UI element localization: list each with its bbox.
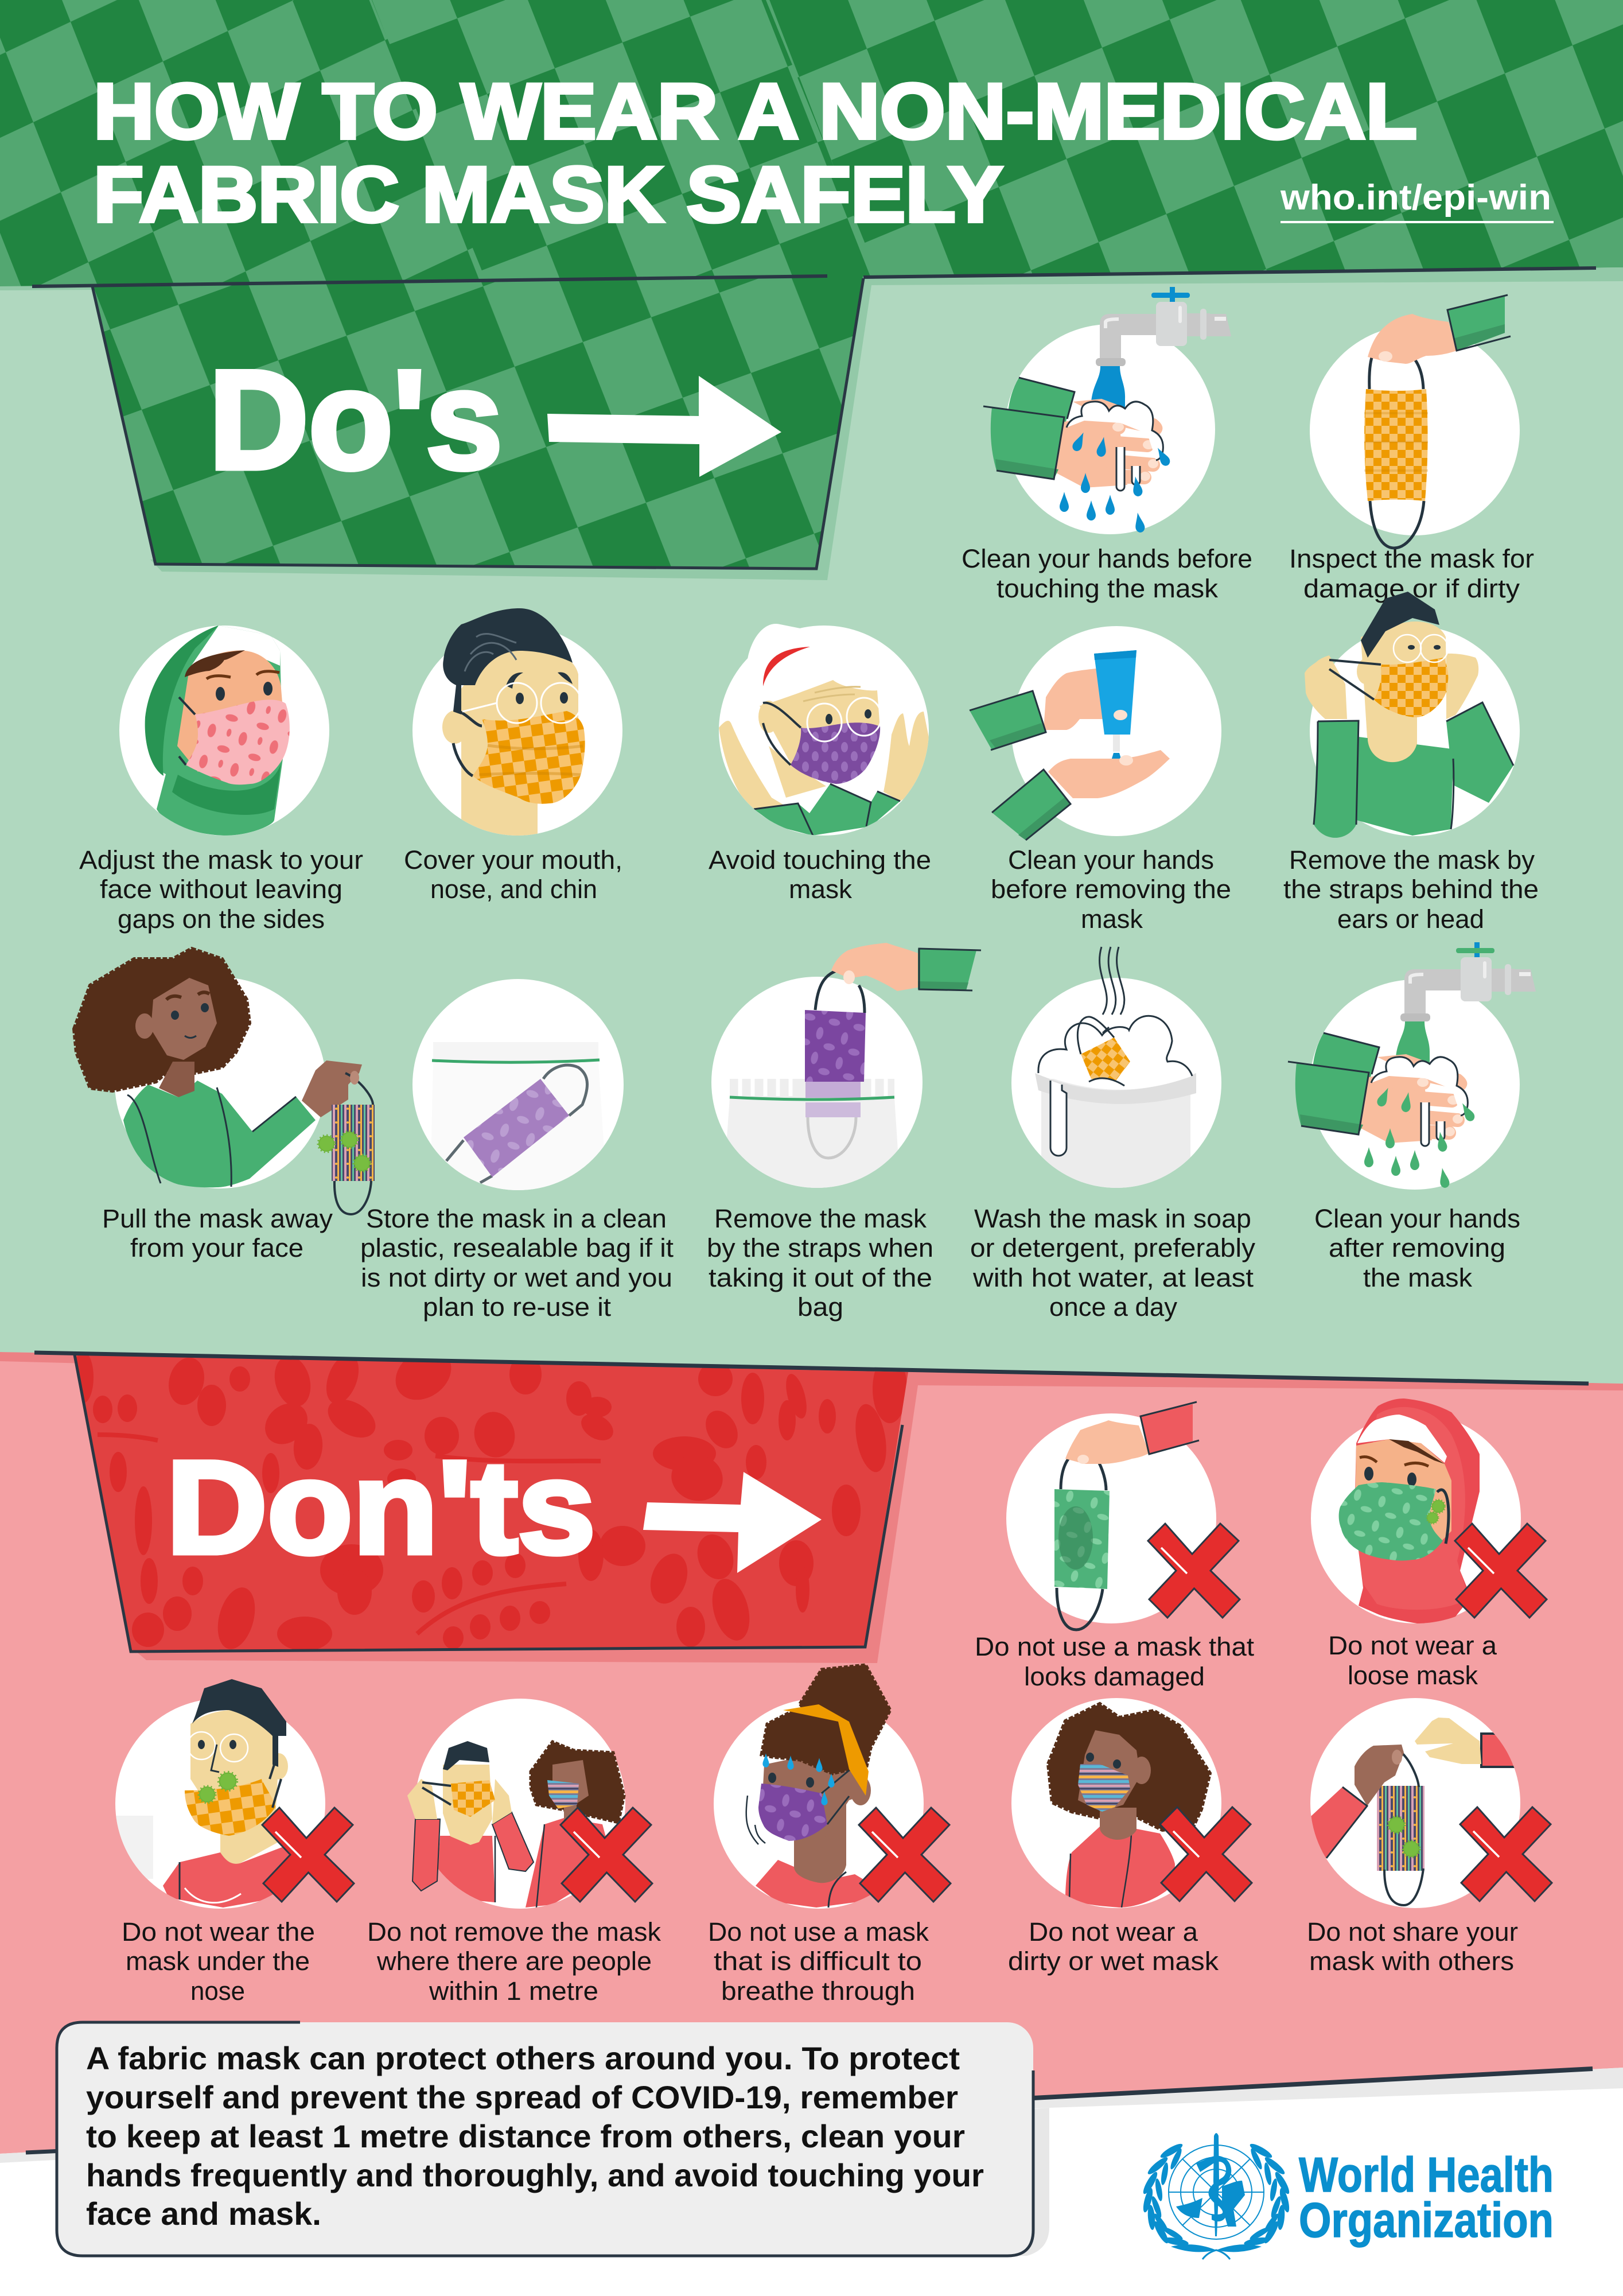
caption: by the straps when (707, 1233, 933, 1262)
do's top shadow band (0, 267, 1623, 290)
circle (1005, 324, 1215, 534)
circle (115, 977, 326, 1188)
don't: mask hard to breathe through (708, 1665, 951, 2006)
callout text: to keep at least 1 metre distance from others, clean your (86, 2118, 965, 2154)
circle (119, 626, 329, 836)
icon: hands under tap with green water (1288, 942, 1536, 1188)
caption: with hot water, at least (972, 1263, 1254, 1292)
caption: after removing (1329, 1233, 1505, 1262)
caption (708, 1917, 929, 2006)
circle (1310, 980, 1520, 1190)
caption: the mask (1363, 1263, 1473, 1292)
circle (1311, 1413, 1521, 1623)
icon: man wearing mask below nose (163, 1679, 289, 1907)
caption: Do not use a mask that (975, 1632, 1255, 1661)
circle (1006, 1413, 1216, 1623)
callout text: A fabric mask can protect others around you. To protect (86, 2040, 960, 2076)
caption: or detergent, preferably (970, 1233, 1256, 1262)
panel: do's background (0, 270, 1623, 1384)
caption: before removing the (991, 875, 1231, 904)
circle (115, 1699, 325, 1909)
caption: within 1 metre (429, 1976, 598, 2006)
icon: hand lifting purple mask (805, 943, 981, 1082)
caption: Clean your hands (1314, 1204, 1520, 1233)
icon: red cross (1455, 1524, 1547, 1618)
caption (360, 1204, 674, 1322)
don't: dirty or wet mask (1008, 1698, 1252, 1976)
caption: Wash the mask in soap (974, 1204, 1251, 1233)
do's banner (92, 274, 863, 569)
caption: face without leaving (100, 875, 342, 904)
icon: red cross (1148, 1524, 1240, 1618)
do's banner shadow (150, 278, 871, 580)
caption: is not dirty or wet and you (361, 1263, 672, 1292)
panel: don'ts background (0, 1349, 1623, 2154)
heading: Do's: Do's (209, 341, 503, 498)
caption (1008, 1917, 1219, 1976)
caption (404, 845, 622, 904)
caption: plan to re-use it (423, 1292, 612, 1322)
title: HOW TO WEAR A NON-MEDICAL (94, 68, 1417, 156)
step: avoid touching the mask (709, 624, 931, 904)
icon: hands under tap (983, 287, 1231, 533)
don't: damaged mask (975, 1402, 1255, 1691)
icon: hand holding orange mask (1364, 295, 1511, 548)
don'ts banner outline (75, 1355, 902, 1652)
step: clean hands before touching the mask (962, 287, 1252, 603)
caption (970, 1204, 1256, 1322)
logo wordmark: Organization (1299, 2193, 1554, 2248)
caption: loose mask (1348, 1661, 1478, 1690)
footer divider line right (1033, 2069, 1593, 2098)
caption: Remove the mask (714, 1204, 927, 1233)
caption: Do not wear a (1029, 1917, 1198, 1947)
callout panel (57, 2022, 1033, 2256)
circle (1310, 1698, 1520, 1908)
caption: Avoid touching the (709, 845, 931, 875)
icon: mask in plastic bag (430, 1042, 607, 1194)
icon: bucket with foam and mask (1035, 947, 1196, 1194)
title (94, 68, 1417, 239)
don't: loose mask (1311, 1398, 1547, 1690)
icon: red cross (1460, 1807, 1552, 1901)
caption: mask under the (126, 1947, 310, 1976)
caption: Clean your hands (1008, 845, 1214, 875)
caption: taking it out of the (709, 1263, 932, 1292)
step: adjust the mask (79, 626, 363, 934)
caption: Inspect the mask for (1289, 544, 1534, 573)
arrow: do's (547, 376, 781, 477)
caption: Do not wear the (122, 1917, 315, 1947)
step: wash the mask (970, 947, 1256, 1322)
step: remove the mask by the straps (1283, 592, 1539, 934)
icon: older woman with purple mask (719, 624, 931, 836)
don'ts divider line (34, 1353, 1589, 1384)
step: pull the mask away (74, 949, 375, 1262)
caption: Pull the mask away (102, 1204, 333, 1233)
caption: from your face (130, 1233, 303, 1262)
caption: Clean your hands before (962, 544, 1252, 573)
icon: two hands passing dirty mask (1302, 1718, 1515, 1905)
website link: who.int/epi-win (1280, 178, 1551, 217)
icon: red cross (859, 1808, 951, 1902)
caption: that is difficult to (714, 1947, 922, 1976)
step: inspect the mask (1289, 295, 1534, 603)
caption: once a day (1049, 1292, 1178, 1322)
heading: Don'ts: Don'ts (166, 1433, 596, 1581)
callout text: face and mask. (86, 2196, 321, 2232)
icon: woman in green headscarf with pink mask (145, 626, 290, 836)
don't: remove mask near people (367, 1699, 661, 2006)
caption (79, 845, 363, 934)
logo wordmark (1299, 2148, 1554, 2248)
WHO logo (1141, 2133, 1554, 2259)
circle (714, 1699, 924, 1909)
callout shadow (1010, 2108, 1049, 2256)
footer shadow band (0, 2068, 1623, 2163)
caption: nose, and chin (430, 875, 597, 904)
caption: mask (1081, 904, 1143, 934)
circle (1310, 626, 1520, 836)
caption: Remove the mask by (1289, 845, 1535, 875)
icon: woman with dirty patterned mask (1048, 1704, 1210, 1907)
icon: bag with mask (723, 1079, 901, 1194)
don'ts banner (69, 1338, 918, 1658)
caption (991, 845, 1231, 934)
caption: touching the mask (997, 574, 1219, 603)
icon: woman holding mask with viruses (74, 949, 375, 1214)
callout text: yourself and prevent the spread of COVID-19, remember (86, 2079, 958, 2115)
caption: mask (789, 875, 853, 904)
caption: Do not remove the mask (367, 1917, 661, 1947)
step: store the mask (360, 979, 674, 1322)
caption: bag (797, 1292, 843, 1322)
icon: man with orange mask (442, 608, 585, 838)
door in background (115, 1816, 153, 1879)
icon: man removing mask by straps (1305, 592, 1513, 838)
caption (707, 1204, 933, 1322)
caption: nose (190, 1976, 245, 2006)
step: remove the mask from the bag (707, 943, 981, 1322)
caption (367, 1917, 661, 2006)
caption (962, 544, 1252, 603)
caption: the straps behind the (1283, 875, 1539, 904)
circle (415, 1699, 625, 1909)
caption (1283, 845, 1539, 934)
icon: red cross (1160, 1807, 1252, 1901)
callout text (86, 2040, 984, 2232)
caption (1289, 544, 1534, 603)
caption: gaps on the sides (118, 904, 325, 934)
icon: hand holding damaged green mask (1054, 1402, 1199, 1630)
step: clean hands after removing (1288, 942, 1536, 1292)
caption: ears or head (1337, 904, 1484, 934)
circle (1310, 325, 1520, 535)
circle (719, 626, 929, 836)
icon: woman in red headscarf with loose mask (1339, 1398, 1480, 1623)
circle (1011, 626, 1221, 836)
caption: damage or if dirty (1303, 574, 1520, 603)
step: cover mouth, nose and chin (404, 608, 622, 904)
icon: woman struggling to breathe with purple mask (746, 1665, 890, 1907)
circle (1011, 1698, 1221, 1908)
arrow: don'ts (643, 1472, 822, 1573)
don'ts top shadow band (0, 1352, 1623, 1390)
circle (711, 977, 923, 1188)
circle (412, 979, 624, 1190)
circle (1011, 978, 1221, 1188)
caption: plastic, resealable bag if it (360, 1233, 674, 1262)
caption: mask with others (1309, 1947, 1514, 1976)
logo wordmark: World Health (1299, 2148, 1554, 2202)
caption (102, 1204, 333, 1262)
icon: hands with sanitizer tube (970, 650, 1170, 840)
caption: looks damaged (1024, 1662, 1205, 1691)
caption (1328, 1631, 1497, 1690)
icon: red cross (561, 1808, 652, 1902)
caption (709, 845, 931, 904)
floral pattern (73, 1338, 907, 1653)
caption: Adjust the mask to your (79, 845, 363, 875)
icon: man removing mask beside woman (407, 1741, 624, 1907)
step: clean hands before removing (970, 626, 1231, 934)
don'ts banner shadow (131, 1372, 918, 1663)
header divider line left (32, 276, 827, 286)
do's banner outline (92, 278, 863, 569)
caption: breathe through (721, 1976, 915, 2006)
caption (122, 1917, 315, 2006)
icon: red cross (262, 1808, 354, 1902)
footer divider line left (26, 2151, 63, 2153)
don't: share mask (1302, 1698, 1552, 1976)
caption: Store the mask in a clean (366, 1204, 667, 1233)
caption: Do not wear a (1328, 1631, 1497, 1660)
caption: dirty or wet mask (1008, 1947, 1219, 1976)
caption (1314, 1204, 1520, 1292)
title: FABRIC MASK SAFELY (94, 151, 1003, 239)
caption (975, 1632, 1255, 1691)
caption: Do not share your (1307, 1917, 1518, 1947)
header: checkered background (0, 0, 1623, 286)
caption: where there are people (376, 1947, 652, 1976)
don't: mask under the nose (115, 1679, 354, 2006)
icon: WHO emblem (1141, 2133, 1291, 2259)
circle (412, 626, 622, 836)
callout text: hands frequently and thoroughly, and avoid touching your (86, 2157, 984, 2193)
caption (1307, 1917, 1518, 1976)
header divider line right (863, 268, 1596, 277)
caption: Do not use a mask (708, 1917, 929, 1947)
caption: Cover your mouth, (404, 845, 622, 875)
